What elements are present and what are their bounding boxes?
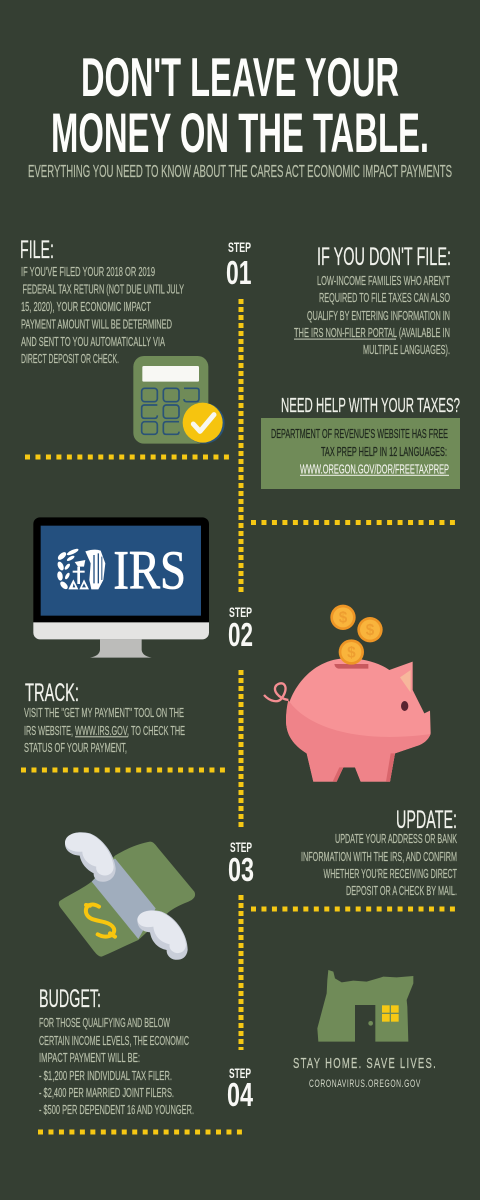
- text block: track: IRS WEBSITE, WWW.IRS.GOV, TO CHECK THE: [24, 723, 185, 738]
- heading: track: TRACK:: [25, 679, 79, 707]
- panel: file: [20, 236, 225, 444]
- heading: file: FILE:: [20, 236, 54, 264]
- coin: $: [366, 622, 375, 639]
- text block: file: 15, 2020), YOUR ECONOMIC IMPACT: [21, 299, 151, 314]
- step 03 label: 03: [228, 851, 254, 888]
- coin: $: [339, 610, 348, 627]
- text block: file: DIRECT DEPOSIT OR CHECK.: [21, 351, 119, 366]
- wing: bottom: [137, 910, 188, 960]
- text block: file: FEDERAL TAX RETURN (NOT DUE UNTIL JULY: [22, 282, 184, 296]
- text block: budget: IMPACT PAYMENT WILL BE:: [39, 1050, 140, 1065]
- step 04 label: STEP: [229, 1065, 251, 1081]
- title: [51, 46, 429, 164]
- step 04 label: 04: [227, 1076, 253, 1113]
- step 01 label: [226, 239, 252, 291]
- panel: tax prep help: [261, 418, 460, 489]
- icon: piggy bank with coins: [264, 605, 431, 782]
- text block: budget: CERTAIN INCOME LEVELS, THE ECONOMIC: [39, 1033, 189, 1048]
- panel: track: [24, 679, 185, 755]
- step 02 label: STEP: [229, 604, 252, 620]
- step 01 label: 01: [226, 254, 252, 291]
- step 04 label: [227, 1065, 253, 1113]
- step 03 label: [228, 839, 254, 888]
- heading: budget: BUDGET:: [39, 985, 101, 1013]
- text block: update: [301, 831, 457, 898]
- step 03 label: STEP: [230, 839, 252, 855]
- panel: update: [301, 806, 457, 898]
- IRS eagle seal: [56, 548, 105, 591]
- text block: track: STATUS OF YOUR PAYMENT,: [24, 740, 127, 755]
- text block: file: [21, 264, 184, 366]
- text block: track: VISIT THE "GET MY PAYMENT" TOOL ON THE: [24, 705, 184, 720]
- icon: calculator: [133, 356, 225, 444]
- text block: budget: - $1,200 PER INDIVIDUAL TAX FILER.: [39, 1068, 172, 1083]
- step 01 label: STEP: [228, 239, 251, 255]
- text block: file: IF YOU'VE FILED YOUR 2018 OR 2019: [21, 264, 155, 279]
- icon: flying money: [59, 832, 195, 960]
- step 02 label: [228, 604, 253, 653]
- icon: computer monitor with IRS logo: [33, 517, 209, 658]
- text block: file: AND SENT TO YOU AUTOMATICALLY VIA: [21, 334, 165, 349]
- dotted timeline connectors: [21, 299, 456, 1132]
- panel: stay home logo: [293, 970, 437, 1090]
- text block: budget: FOR THOSE QUALIFYING AND BELOW: [39, 1015, 170, 1030]
- text block: budget: - $2,400 PER MARRIED JOINT FILERS.: [39, 1085, 174, 1100]
- text block: budget: - $500 PER DEPENDENT 16 AND YOUNGER.: [39, 1102, 194, 1117]
- text block: budget: [39, 1015, 194, 1117]
- text block: file: PAYMENT AMOUNT WILL BE DETERMINED: [21, 316, 172, 332]
- text block: track: [24, 705, 185, 755]
- panel: if you don't file: [294, 243, 451, 357]
- IRS wordmark: IRS: [113, 539, 186, 600]
- wing: top: [65, 832, 116, 882]
- text block: if you don't file: [294, 273, 450, 357]
- panel: budget: [39, 985, 194, 1117]
- coin: $: [347, 644, 356, 661]
- step 02 label: 02: [228, 616, 253, 653]
- icon: Oregon house: [317, 970, 413, 1042]
